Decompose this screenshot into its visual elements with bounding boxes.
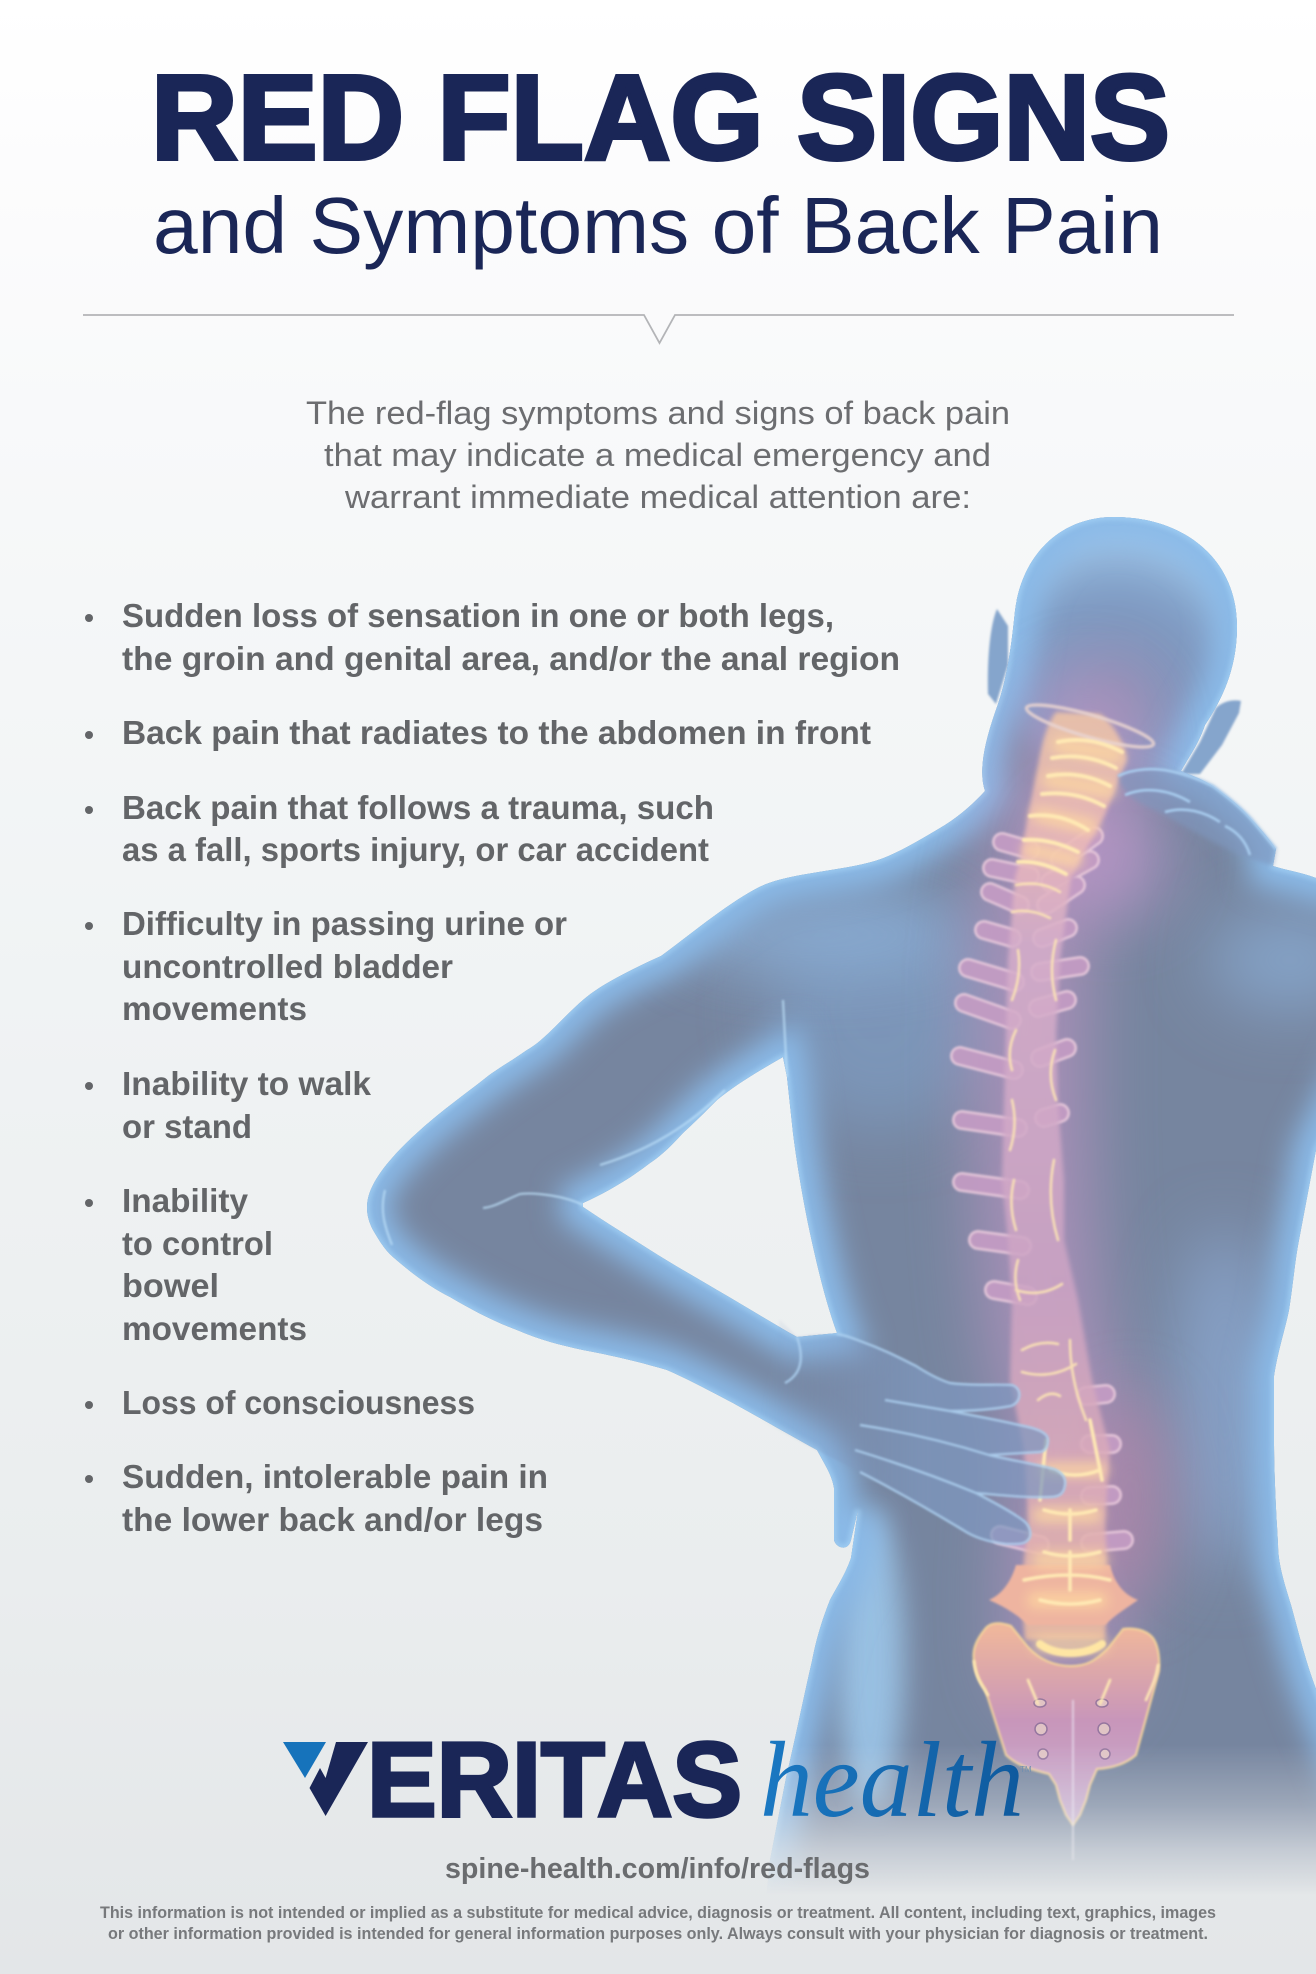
illustration: translucent human back with glowing spine bbox=[367, 517, 1316, 1884]
bullet: trauma: Back pain that follows a trauma, such bbox=[122, 789, 714, 826]
vertebral column bbox=[1002, 712, 1127, 1640]
L5 wings bbox=[989, 1565, 1138, 1625]
wordmark: ERITAS bbox=[367, 1721, 742, 1839]
Veritas Health logo bbox=[283, 1721, 1032, 1840]
bullet: bowel bbox=[85, 1182, 307, 1347]
bullet: loss of sensation: the groin and genital area, and/or the anal region bbox=[122, 640, 900, 677]
hand on lower back bbox=[760, 1320, 1065, 1544]
transverse processes bbox=[960, 836, 1124, 1545]
bullet: walking bbox=[85, 1065, 372, 1145]
bullet: consciousness: Loss of consciousness bbox=[122, 1384, 475, 1421]
intro text bbox=[306, 395, 1010, 515]
logo mark bbox=[283, 1742, 368, 1816]
head shading bbox=[1004, 517, 1237, 770]
bullet: urine: Difficulty in passing urine or bbox=[122, 905, 567, 942]
intro text: warrant immediate medical attention are: bbox=[344, 479, 971, 515]
disclaimer bbox=[100, 1903, 1216, 1943]
title bbox=[151, 49, 1170, 270]
bullet: intolerable pain: Sudden, intolerable pain in bbox=[122, 1458, 548, 1495]
glowing highlights bbox=[974, 697, 1158, 1704]
website url: spine-health.com/info/red-flags bbox=[445, 1853, 870, 1885]
hand on neck bbox=[1118, 769, 1276, 866]
bullet: walking: or stand bbox=[122, 1108, 252, 1145]
intro text: that may indicate a medical emergency and bbox=[324, 437, 991, 473]
bullet: urine bbox=[85, 905, 567, 1027]
trademark: TM bbox=[1020, 1765, 1032, 1774]
sacral foramina bbox=[1034, 1699, 1110, 1759]
disclaimer: This information is not intended or implied as a substitute for medical advice, diagnosis or treatment. All content, including text, graphics, images bbox=[100, 1903, 1216, 1922]
spine glow bbox=[1031, 730, 1088, 1660]
bullet: urine: movements bbox=[122, 990, 307, 1027]
sacrum and pelvis bbox=[973, 1623, 1159, 1825]
health wordmark: health bbox=[760, 1721, 1024, 1840]
ears bbox=[988, 609, 1241, 774]
bullet: walking: Inability to walk bbox=[122, 1065, 372, 1102]
bullet: bowel: to control bbox=[122, 1225, 273, 1262]
bullet: bowel: bowel bbox=[122, 1267, 219, 1304]
subheading: and Symptoms of Back Pain bbox=[153, 181, 1163, 270]
heading: Red Flag Signs: RED FLAG SIGNS bbox=[151, 49, 1170, 185]
bullet: trauma bbox=[85, 789, 714, 868]
spine bbox=[960, 697, 1159, 1860]
bullet: bowel: Inability bbox=[122, 1182, 249, 1219]
intro text: The red-flag symptoms and signs of back pain bbox=[306, 395, 1010, 431]
bullet: radiating pain: Back pain that radiates to the abdomen in front bbox=[122, 714, 871, 751]
red flag symptom list bbox=[85, 597, 900, 1538]
divider with notch bbox=[83, 315, 1234, 343]
bullet: trauma: as a fall, sports injury, or car accident bbox=[122, 831, 709, 868]
bullet: loss of sensation bbox=[85, 597, 900, 677]
spine warm glow bbox=[1030, 745, 1115, 1645]
armpit crease and arm highlights bbox=[383, 1000, 787, 1245]
bullet: loss of sensation: Sudden loss of sensation in one or both legs, bbox=[122, 597, 834, 634]
bullet: bowel: movements bbox=[122, 1310, 307, 1347]
inner rim glow bbox=[367, 517, 1316, 1974]
bullet: intolerable pain: the lower back and/or legs bbox=[122, 1501, 543, 1538]
disclaimer: or other information provided is intended for general information purposes only. Always consult with your physician for diagnosis or treatment. bbox=[108, 1924, 1208, 1943]
body silhouette bbox=[367, 517, 1316, 1884]
bullet: urine: uncontrolled bladder bbox=[122, 948, 453, 985]
bullet: intolerable pain bbox=[85, 1458, 548, 1538]
